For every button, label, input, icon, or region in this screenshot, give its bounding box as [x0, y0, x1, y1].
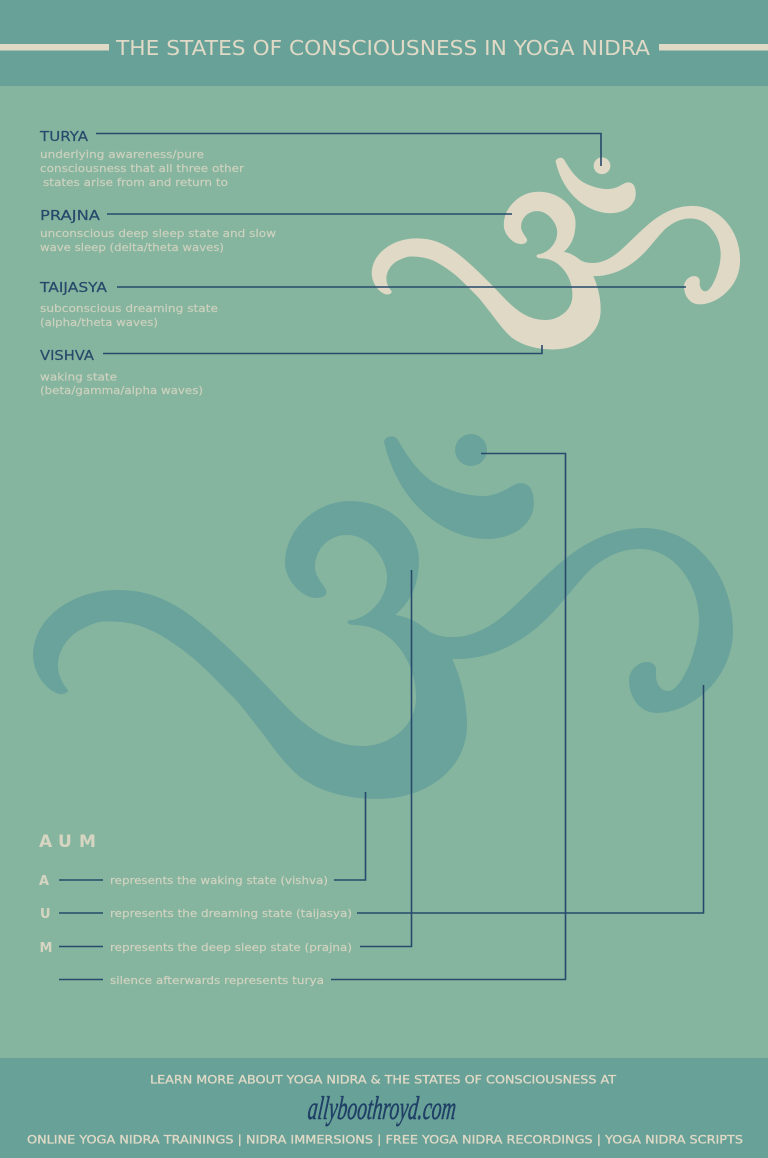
vishva state description: VISHVA	[40, 349, 94, 364]
website script: allyboothroyd.com	[306, 1091, 458, 1127]
footer banner	[0, 1058, 768, 1158]
leader line: turya to om dot	[96, 134, 601, 166]
leader line: vishva to om	[103, 345, 542, 354]
leader line: U to right curve	[357, 685, 704, 913]
row: M deep sleep: represents the deep sleep state (prajna)	[110, 941, 352, 954]
turya state description: consciousness that all three other	[40, 162, 245, 175]
row: A waking: represents the waking state (vishva)	[110, 874, 328, 887]
leader line: A to lower curve	[334, 792, 366, 880]
row: M deep sleep: M	[40, 941, 52, 956]
row: A waking: A	[39, 874, 49, 889]
row: silence: silence afterwards represents turya	[110, 974, 324, 987]
footer links: ONLINE YOGA NIDRA TRAININGS | NIDRA IMMERSIONS | FREE YOGA NIDRA RECORDINGS | YOGA NIDRA SCRIPTS	[27, 1132, 743, 1146]
row: U dreaming	[40, 907, 352, 922]
leader line: taijasya to om	[117, 286, 686, 288]
prajna state description: PRAJNA	[40, 209, 100, 224]
AUM heading: A U M	[0, 832, 96, 852]
leader line: prajna to om	[107, 213, 512, 215]
title: THE STATES OF CONSCIOUSNESS IN YOGA NIDRA	[115, 36, 650, 60]
taijasya state description: (alpha/theta waves)	[40, 316, 158, 329]
row: U dreaming: represents the dreaming state (taijasya)	[110, 907, 352, 920]
turya state description: states arise from and return to	[43, 176, 228, 189]
turya state description	[39, 130, 245, 189]
vishva state description	[40, 349, 203, 397]
turya state description: underlying awareness/pure	[40, 148, 204, 161]
vishva state description: (beta/gamma/alpha waves)	[40, 384, 203, 397]
footer call to action: LEARN MORE ABOUT YOGA NIDRA & THE STATES OF CONSCIOUSNESS AT	[150, 1072, 617, 1086]
leader line: M to upper curve	[360, 570, 412, 946]
taijasya state description: subconscious dreaming state	[40, 302, 218, 315]
turya state description: TURYA	[39, 130, 88, 145]
taijasya state description: TAIJASYA	[39, 281, 107, 296]
prajna state description: unconscious deep sleep state and slow	[40, 227, 276, 240]
prajna state description: wave sleep (delta/theta waves)	[40, 241, 224, 254]
vishva state description: waking state	[40, 370, 117, 384]
header banner	[0, 0, 768, 86]
icon: large teal om symbol	[33, 434, 733, 799]
icon: small cream om symbol	[372, 157, 739, 349]
row: U dreaming: U	[40, 907, 51, 922]
leader line: silence to dot	[331, 454, 566, 980]
row: A waking	[39, 874, 328, 889]
prajna state description	[40, 209, 276, 254]
taijasya state description	[39, 281, 218, 329]
row: M deep sleep	[40, 941, 352, 956]
